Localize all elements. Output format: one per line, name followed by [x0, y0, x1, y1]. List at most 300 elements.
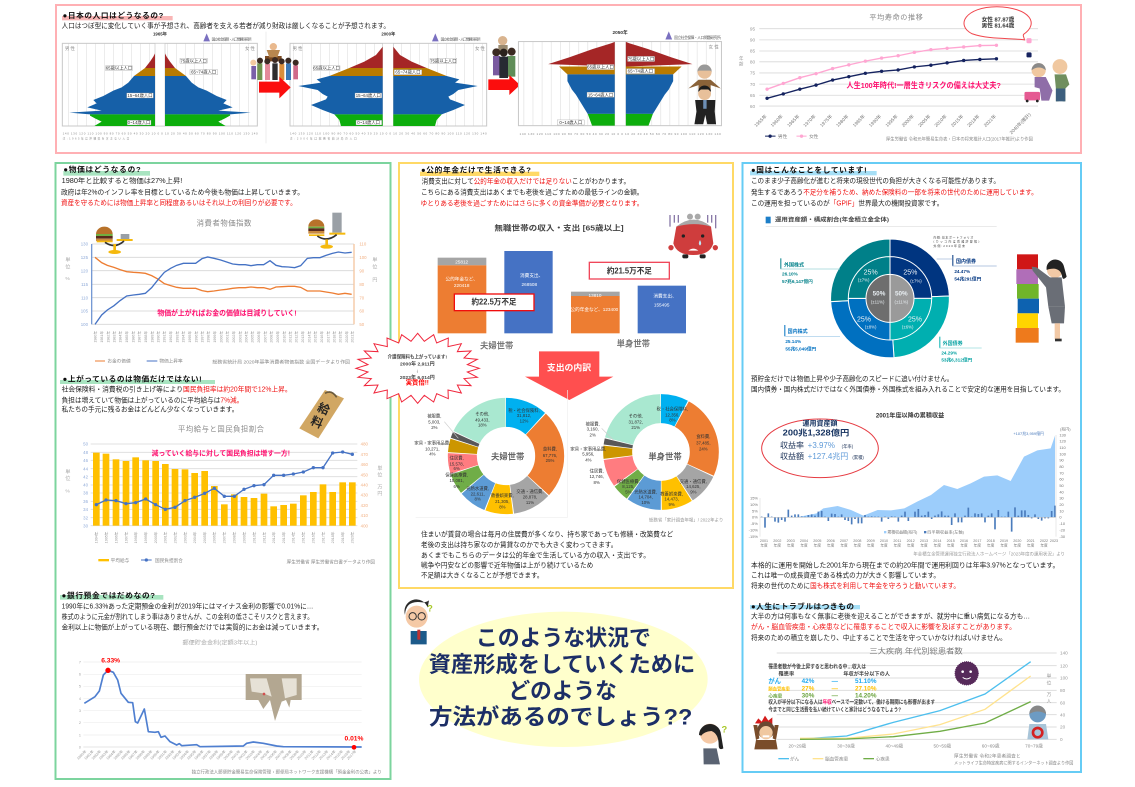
chart: cumulative returns since 2001: 年度: [854, 543, 861, 548]
chart: average salary and burden: 2007年: [222, 531, 227, 543]
chart: cumulative returns since 2001: 2009: [867, 539, 875, 543]
chart: consumer price index: 2007年: [262, 331, 267, 343]
pyramid 1965: 男 性: [65, 45, 76, 52]
life expectancy chart: [739, 12, 1038, 143]
chart: postal savings interest: 1997年: [200, 749, 212, 761]
chart: cumulative returns since 2001: 年度: [760, 543, 768, 548]
chart: consumer price index: 125: [81, 255, 89, 260]
icon: woman with question mark: [699, 724, 727, 764]
pyramid 2050 and life expectancy chart: [518, 7, 1069, 143]
chart: cumulative returns since 2001: 年度: [1040, 543, 1048, 548]
chart: income and spending of retired households: 268508: [522, 282, 538, 287]
callout: assets and returns: (累積): [852, 454, 864, 461]
icon: salary envelope: [299, 390, 344, 438]
chart: GPIF portfolio rings: 外側:2020年度末: [933, 243, 965, 248]
chart: average salary and burden: 36: [83, 499, 89, 504]
section: consumer prices: 資産を守るためには物価上昇率と同程度あるいはそれ以上の利回りが必要です。: [61, 198, 297, 207]
chart: cumulative returns since 2001: 年度: [800, 543, 808, 548]
section: GPIF allocation: ●国はこんなことをしています!: [751, 165, 867, 174]
pyramid 1965: 65~74歳人口: [191, 69, 216, 75]
chart: cumulative returns since 2001: 2012: [907, 539, 915, 543]
chart: consumer price index: 1995年: [187, 331, 192, 343]
life expectancy chart: 70: [750, 82, 755, 88]
donut: single household: 5,956,: [582, 451, 594, 456]
donut: couple household: 49,433,: [475, 417, 490, 422]
chart: consumer price index: 2014年: [306, 331, 311, 343]
chart: consumer price index: 120: [81, 268, 89, 273]
chart: consumer price index: 2021年: [349, 331, 354, 343]
chart: consumer price index: 115: [81, 282, 89, 287]
chart: cumulative returns since 2001: 110: [1059, 445, 1066, 450]
chart: cumulative returns since 2001: (兆円): [1060, 425, 1071, 431]
overlay: income impact table: 51.10%: [855, 678, 877, 685]
donut: couple household: 18%: [478, 422, 487, 427]
chart: cumulative returns since 2001: 年度: [947, 543, 955, 548]
chart: cumulative returns since 2001: 2003: [787, 539, 795, 543]
chart: consumer price index: 2016年: [319, 331, 324, 343]
chart: GPIF portfolio rings: 24.47%: [954, 269, 971, 274]
pyramid 2000: 65歳以上人口: [313, 65, 340, 71]
section: spending donuts: [414, 390, 723, 579]
chart: three major diseases by age: メットライフ生命特定疾病に関するインターネット調査より作図: [954, 759, 1074, 766]
chart: consumer price index: 100: [359, 255, 367, 260]
icon: scale with burger and small coins: [96, 227, 133, 254]
donut: couple household: 21,305,: [495, 499, 510, 504]
life expectancy chart: 1980年: [835, 113, 850, 129]
donut: couple household: 保健医療費,: [445, 471, 468, 478]
chart: three major diseases by age: 80: [1060, 688, 1066, 693]
chart: consumer price index: 110: [359, 242, 367, 247]
chart: cumulative returns since 2001: 2023: [1050, 539, 1058, 543]
donut: couple household: 8%: [475, 497, 481, 502]
chart: consumer price index: 1996年: [193, 331, 198, 343]
headline question: 方法があるのでしょう??: [429, 705, 692, 730]
chart: postal savings interest: 0.01%: [345, 736, 364, 743]
chart: three major diseases by age: 0: [1060, 737, 1063, 742]
chart: postal savings interest: 3: [79, 709, 81, 713]
chart: average salary and burden: [65, 425, 382, 566]
pyramid 1965: 注:1965年は沖縄県を含まない人口: [63, 136, 130, 140]
chart: consumer price index: 1988年: [143, 331, 148, 343]
icon: sad purse: [668, 214, 718, 258]
chart: cumulative returns since 2001: 年度: [1014, 543, 1021, 548]
chart: consumer price index: 1980年: [93, 331, 98, 343]
icon: salary envelope: 料: [309, 413, 326, 431]
chart: postal savings interest: 2015年: [332, 749, 344, 761]
chart: consumer price index: 2010年: [281, 331, 286, 343]
chart: postal savings interest: 2000年: [222, 749, 234, 761]
life expectancy chart: 80: [750, 60, 755, 66]
chart: cumulative returns since 2001: 年度: [987, 543, 995, 548]
panel: prices, salary, deposits: [56, 163, 390, 779]
life expectancy chart: 90: [750, 38, 755, 44]
section: life troubles: [750, 601, 1074, 766]
donut: couple household: 28,878,: [523, 495, 537, 500]
pyramid 2000: 2000年: [381, 31, 396, 38]
donut: single household: 2%: [590, 432, 596, 437]
section: consumer prices: ●物価はどうなるの?: [63, 164, 141, 174]
donut: single household: 24%: [699, 446, 708, 451]
chart: cumulative returns since 2001: 年度: [960, 543, 968, 548]
pyramid 1965: 15~64歳人口: [127, 92, 153, 98]
chart: postal savings interest: 1992年: [163, 749, 176, 761]
section: salary and national burden: [60, 373, 382, 566]
pyramid 2050: 0~14歳人口: [559, 119, 582, 125]
chart: consumer price index: 2006年: [256, 331, 261, 343]
chart: consumer price index: 2004年: [244, 331, 249, 343]
section: pension income versus spending: ●公的年金だけで生活できる?: [421, 164, 531, 174]
chart: average salary and burden: 1994年: [94, 531, 99, 543]
chart: average salary and burden: 2019年: [340, 531, 345, 543]
life expectancy chart: 1990年: [867, 113, 883, 129]
donut: single household: 14,704,: [638, 495, 653, 500]
callout: assets and returns: +127.4兆円: [808, 451, 848, 461]
section: bank deposits: 金利以上に物価が上がっている現在、銀行預金だけでは実質的にお金は減っていきます。: [62, 622, 323, 631]
chart: cumulative returns since 2001: 累積収益額(兆円): [887, 529, 918, 535]
chart: consumer price index: 105: [81, 309, 89, 314]
chart: postal savings interest: 1991年: [156, 749, 168, 761]
donut: single household: 交通・通信費,: [680, 478, 707, 485]
chart: postal savings interest: 1981年: [83, 749, 95, 761]
section: life troubles: がん・脳血管疾患・心疾患などに罹患することで収入に影響を及ぼすことがあります。: [751, 622, 1016, 631]
chart: GPIF portfolio rings: 外国株式: [784, 261, 804, 268]
donut: couple household: 2%: [431, 425, 438, 430]
life expectancy chart: 1975年: [818, 113, 834, 129]
life expectancy chart: 60: [750, 104, 755, 110]
chart: postal savings interest: 2005年: [259, 749, 271, 761]
chart: consumer price index: 2015年: [313, 331, 318, 343]
section: bank deposits: [60, 590, 382, 776]
donut: couple household: 11%: [526, 500, 534, 505]
overlay: income impact table: —: [832, 693, 839, 700]
chart: cumulative returns since 2001: 2017: [973, 539, 981, 543]
chart: three major diseases by age: 30~39歳: [837, 742, 855, 748]
chart: average salary and burden: 2011年: [261, 531, 266, 543]
pyramid 2000: 65~74歳人口: [395, 69, 421, 75]
overlay: income impact table: 罹患者数が今後上昇すると思われる中…収入は: [768, 662, 866, 670]
donut: couple household: 光熱水道費,: [466, 485, 489, 492]
life expectancy chart: 75: [750, 71, 755, 77]
chart: income and spending of retired households: 夫婦世帯: [480, 341, 513, 351]
chart: postal savings interest: 2010年: [295, 749, 308, 761]
pyramid 2000: 15~64歳人口: [356, 92, 381, 98]
chart: three major diseases by age: がん: [790, 755, 800, 762]
chart: three major diseases by age: [768, 646, 1074, 766]
chart: average salary and burden: 1996年: [113, 531, 118, 543]
chart: cumulative returns since 2001: 2015: [947, 539, 955, 543]
chart: postal savings interest: 2003年: [244, 749, 256, 761]
chart: average salary and burden: 460: [361, 462, 368, 467]
chart: three major diseases by age: 脳血管疾患: [825, 755, 849, 762]
callout burst: long-term care premium: ↓: [416, 368, 419, 374]
chart: cumulative returns since 2001: -5%: [751, 521, 758, 526]
chart: postal savings interest: 2008年: [281, 749, 293, 761]
chart: consumer price index: 1983年: [112, 331, 117, 343]
callout: assets and returns: 収益率: [780, 440, 804, 450]
chart: consumer price index: 60: [359, 309, 365, 314]
icon: man with question mark: ?: [427, 604, 433, 614]
chart: cumulative returns since 2001: 2004: [800, 539, 808, 543]
chart: GPIF portfolio rings: 25%: [908, 316, 922, 323]
chart: income and spending of retired households: 単身世帯: [617, 338, 650, 348]
donut: single household: 8%: [669, 417, 676, 422]
chart: GPIF portfolio rings: 24.29%: [941, 350, 958, 355]
chart: cumulative returns since 2001: 年度: [827, 543, 835, 548]
headline question: どのような: [508, 678, 617, 703]
chart: cumulative returns since 2001: 5%: [752, 508, 758, 513]
chart: cumulative returns since 2001: 年度: [1027, 543, 1035, 548]
chart: average salary and burden: 2008年: [232, 531, 237, 543]
section: GPIF cumulative returns: 本格的に運用を開始した2001年から現在までの約20年間で運用利回りは年率3.97%となっています。: [751, 560, 1059, 569]
chart: postal savings interest: [75, 639, 382, 776]
chart: average salary and burden: 2015年: [301, 531, 306, 543]
icon: group of three adults supporting an elder: [492, 36, 516, 78]
overlay: income impact table: —: [832, 678, 839, 685]
chart: cumulative returns since 2001: 年度: [814, 543, 821, 548]
chart: income and spending of retired households: 公的年金など、123400: [570, 306, 619, 313]
chart: income and spending of retired households: 13810: [589, 293, 602, 298]
chart: postal savings interest: 1983年: [97, 749, 110, 761]
chart: GPIF portfolio rings: 25.14%: [785, 339, 802, 344]
chart: postal savings interest: 1985年: [112, 749, 124, 761]
section: GPIF allocation: [750, 165, 1067, 394]
pyramid 1965: [62, 31, 258, 140]
chart: postal savings interest: 1998年: [207, 749, 220, 761]
donut: single household: 単身世帯: [648, 451, 682, 461]
arrow 2: [488, 75, 520, 95]
body text: pension notes: 老後の支出は持ち家なのか賃貸なのかでも大きく変わってきます。: [421, 540, 617, 549]
life expectancy chart: 1960年: [769, 113, 785, 129]
chart: average salary and burden: 400: [361, 523, 368, 528]
overlay: income impact table: 27%: [802, 686, 815, 693]
chart: average salary and burden: 2004年: [192, 531, 197, 543]
life expectancy chart: 2015年: [949, 113, 965, 129]
pyramid 2000: 女 性: [475, 45, 486, 52]
chart: consumer price index: 総務省統計局 2020年基準消費者物価指数 全国データより作図: [212, 359, 350, 366]
chart: consumer price index: 130: [81, 242, 89, 247]
chart: cumulative returns since 2001: -10%: [749, 528, 758, 533]
chart: cumulative returns since 2001: 2022: [1040, 539, 1048, 543]
donut: single household: 37,485,: [696, 441, 711, 446]
chart: consumer price index: 2019年: [338, 331, 343, 343]
chart: cumulative returns since 2001: 2019: [1000, 539, 1008, 543]
chart: consumer price index: 2002年: [231, 331, 236, 343]
donut: couple household: 5,003,: [428, 419, 440, 424]
section: GPIF allocation: このまま少子高齢化が進むと将来の現役世代の負担が大きくなる可能性があります。: [751, 176, 1000, 185]
donut: couple household: 被服費,: [427, 412, 441, 419]
chart: postal savings interest: 1999年: [215, 749, 227, 761]
section: bank deposits: 株式のように元金が割れてしまう事はありませんが、この金利の低さこそリスクと言えます。: [62, 612, 313, 621]
donut: couple household: その他,: [475, 410, 489, 417]
donut: couple household: 8%: [499, 505, 506, 510]
chart: postal savings interest: 1989年: [141, 749, 154, 761]
pyramid 2000: [290, 31, 487, 140]
donut: couple household: 25%: [546, 458, 554, 463]
chart: GPIF portfolio rings: (±11%): [871, 300, 885, 305]
callout: assets and returns: 200兆1,328億円: [783, 428, 849, 438]
donut: couple household: 教養娯楽費,: [491, 492, 514, 499]
arrow: spending breakdown: [525, 351, 613, 400]
chart: postal savings interest: 1988年: [134, 749, 146, 761]
section: life troubles: 将来のための積立を崩したり、中止することで生活を守っていかなければいけません。: [751, 633, 1007, 642]
chart: cumulative returns since 2001: 年度: [974, 543, 981, 548]
donut: single household: 14,625,: [686, 484, 701, 489]
chart: consumer price index: お金の価値: [107, 358, 131, 365]
chart: three major diseases by age: 心疾患: [876, 755, 890, 762]
chart: consumer price index: 2018年: [331, 331, 336, 343]
chart: postal savings interest: 2011年: [303, 749, 315, 761]
chart: average salary and burden: 1997年: [123, 531, 128, 543]
life expectancy chart: 年: [739, 55, 744, 62]
chart: postal savings interest: 2014年: [325, 749, 337, 761]
section: salary and national burden: 負担は増えていて物価は上がっているのに平均給与は7%減。: [62, 395, 243, 404]
donut: couple household: 67,776,: [543, 453, 557, 458]
chart: cumulative returns since 2001: 2016: [960, 539, 968, 543]
chart: consumer price index: 消費者物価指数: [197, 218, 252, 227]
chart: average salary and burden: 2017年: [320, 531, 325, 543]
chart: GPIF portfolio rings: 国内債券: [956, 258, 976, 265]
chart: cumulative returns since 2001: 60: [1059, 477, 1065, 482]
icon: scale with burger and tall coins: [308, 213, 345, 249]
chart: cumulative returns since 2001: 40: [1059, 489, 1065, 494]
callout: assets and returns: +3.97%: [808, 441, 835, 450]
donut: couple household: 6%: [454, 466, 460, 471]
callout burst: long-term care premium: 2000年 2,911円: [400, 361, 435, 368]
donut: single household: 9%: [669, 502, 675, 507]
life expectancy chart: 平均寿命の推移: [869, 12, 923, 21]
life expectancy chart: 1995年: [884, 113, 900, 129]
chart: cumulative returns since 2001: 年金積立金管理運用独立行政法人ホームページ「2023年度の運用状況」より: [913, 551, 1065, 558]
pyramid 2000: 75歳以上人口: [430, 57, 457, 63]
chart: cumulative returns since 2001: 2021: [1027, 539, 1035, 543]
chart: average salary and burden: 410: [361, 513, 368, 518]
donut: single household: 8%: [594, 480, 600, 485]
chart: cumulative returns since 2001: 年度: [920, 543, 928, 548]
donut: couple household: 22,611,: [471, 492, 485, 497]
chart: income and spending of retired households: 25812: [455, 260, 469, 265]
callout: life expectancy 2040: [964, 7, 1031, 40]
chart: average salary and burden: 2020年: [350, 531, 355, 543]
donut: couple household: 12%: [520, 418, 528, 423]
donut: couple household: 交通・通信費,: [516, 488, 544, 495]
chart: cumulative returns since 2001: 年度: [894, 543, 901, 548]
chart: postal savings interest: 1982年: [90, 749, 102, 761]
section: GPIF allocation: この運用を担っているのが「GPIF」世界最大の機関投資家です。: [751, 198, 943, 207]
chart: postal savings interest: 5: [79, 685, 81, 689]
pyramid 2000: 注:2000年は総務省統計局の人口: [290, 136, 357, 140]
donut: single household: 食料費,: [696, 433, 710, 440]
chart: average salary and burden: 38: [83, 491, 89, 496]
chart: postal savings interest: 2006年: [266, 749, 278, 761]
chart: average salary and burden: 470: [361, 452, 368, 457]
chart: cumulative returns since 2001: 年度: [907, 543, 915, 548]
chart: average salary and burden: 厚生労働省 厚生労働省白書データより作図: [287, 559, 375, 566]
chart: three major diseases by age: 120: [1060, 663, 1068, 668]
life expectancy chart: 1965年: [786, 113, 801, 129]
chart: cumulative returns since 2001: -10: [1059, 521, 1066, 526]
section: GPIF allocation: 国内債券・国内株式だけではなく外国債券・外国株式を組み入れることで安定的な運用を目指しています。: [751, 385, 1065, 394]
section: pension income versus spending: [420, 164, 718, 400]
donut: couple household: 10,271,: [425, 446, 440, 451]
chart: postal savings interest: 4: [79, 697, 81, 701]
chart: cumulative returns since 2001: 80: [1059, 464, 1065, 469]
chart: postal savings interest: 郵便貯金金利(定額3年以上): [182, 639, 258, 647]
chart: GPIF portfolio rings: 53兆6,312億円: [941, 357, 972, 364]
overlay: income impact table: 脳血管疾患: [768, 685, 791, 692]
pyramid 2000: 0~14歳人口: [357, 119, 380, 125]
chart: consumer price index: 2005年: [250, 331, 255, 343]
life expectancy chart: 65: [750, 93, 755, 99]
pyramid 1965: 国立社会保障・人口問題研究所: [212, 37, 252, 42]
pyramid 1965: 0~14歳人口: [128, 119, 150, 125]
overlay: income impact table: —: [832, 686, 839, 693]
chart: consumer price index: 物価上昇率: [159, 358, 183, 365]
chart: cumulative returns since 2001: 2002: [773, 539, 781, 543]
chart: cumulative returns since 2001: 年度: [840, 543, 848, 548]
chart: average salary and burden: 単: [377, 465, 382, 472]
overlay: income impact table: [768, 662, 935, 713]
chart: three major diseases by age: 厚生労働省 令和2年患者調査と: [954, 752, 1021, 759]
chart: GPIF portfolio rings: 57兆6,147億円: [782, 278, 813, 285]
chart: three major diseases by age: 100: [1060, 676, 1068, 681]
chart: cumulative returns since 2001: +107兆3,959億円: [1013, 430, 1044, 436]
donut: couple household: 31,812,: [517, 413, 531, 418]
section: consumer prices: 政府は年2%のインフレ率を目標としているため今後も物価は上昇していきます。: [61, 188, 304, 197]
chart: income and spending of retired households: 公的年金など、: [445, 276, 478, 283]
chart: consumer price index: 1993年: [174, 331, 179, 343]
donut: single household: 12,356,: [665, 412, 680, 417]
chart: consumer price index: 50: [359, 322, 365, 327]
life expectancy chart: 1955年: [753, 113, 769, 129]
donut: couple household: 税・社会保険料,: [508, 407, 540, 414]
chart: consumer price index: 80: [359, 282, 365, 287]
section: pension income versus spending: 消費支出に対して公的年金の収入だけでは足りないことがわかります。: [422, 176, 630, 185]
overlay: income impact table: 今までと同じ生活費を払い続けていくと家計はどうなるでしょう?: [768, 705, 901, 713]
donut: single household: 教養娯楽費,: [660, 490, 683, 497]
section: pension income versus spending: ゆとりある老後を過ごすためにはさらに多くの資金準備が必要となります。: [421, 198, 643, 207]
chart: consumer price index: 位: [372, 263, 377, 270]
chart: postal savings interest: 7: [79, 660, 81, 664]
life expectancy chart: 1985年: [851, 113, 867, 129]
body text: pension notes: 住まいが賃貸の場合は毎月の住居費が多くなり、持ち家であっても修繕・改築費など: [421, 529, 673, 538]
life expectancy chart: 85: [750, 49, 755, 55]
chart: postal savings interest: 2009年: [288, 749, 300, 761]
chart: postal savings interest: 2004年: [251, 749, 264, 761]
chart: consumer price index: 1992年: [168, 331, 173, 343]
life expectancy chart: 2010年: [933, 113, 949, 129]
chart: consumer price index: 1986年: [130, 331, 135, 343]
pyramid 1965: 1965年: [153, 31, 168, 38]
callout: life expectancy 2040: 女性 87.87歳: [982, 15, 1015, 23]
chart: cumulative returns since 2001: 年度: [867, 543, 875, 548]
chart: cumulative returns since 2001: 2001: [760, 539, 768, 543]
chart: consumer price index: 1984年: [118, 331, 123, 343]
chart: average salary and burden: 2018年: [330, 531, 335, 543]
section: life troubles: 大半の方は何事もなく無事に老後を迎えることができますが、就労中に重い病気になる方も…: [751, 611, 1030, 620]
chart: cumulative returns since 2001: 15%: [750, 495, 758, 500]
chart: average salary and burden: 48: [83, 450, 89, 455]
chart: postal savings interest: 2012年: [310, 749, 322, 761]
chart: GPIF portfolio rings: (カッコ内は乖離許容幅): [933, 239, 979, 244]
chart: postal savings interest: 2017年: [345, 749, 358, 761]
chart: three major diseases by age: 位: [1047, 679, 1052, 685]
section: GPIF cumulative returns: [749, 412, 1071, 590]
chart: GPIF portfolio rings: 25%: [857, 316, 871, 323]
donut: couple household: 4%: [429, 452, 436, 457]
chart: cumulative returns since 2001: -15%: [749, 534, 758, 539]
callout burst: long-term care premium: [356, 333, 479, 403]
donut: single household: 家具・家事用品費,: [570, 445, 606, 452]
